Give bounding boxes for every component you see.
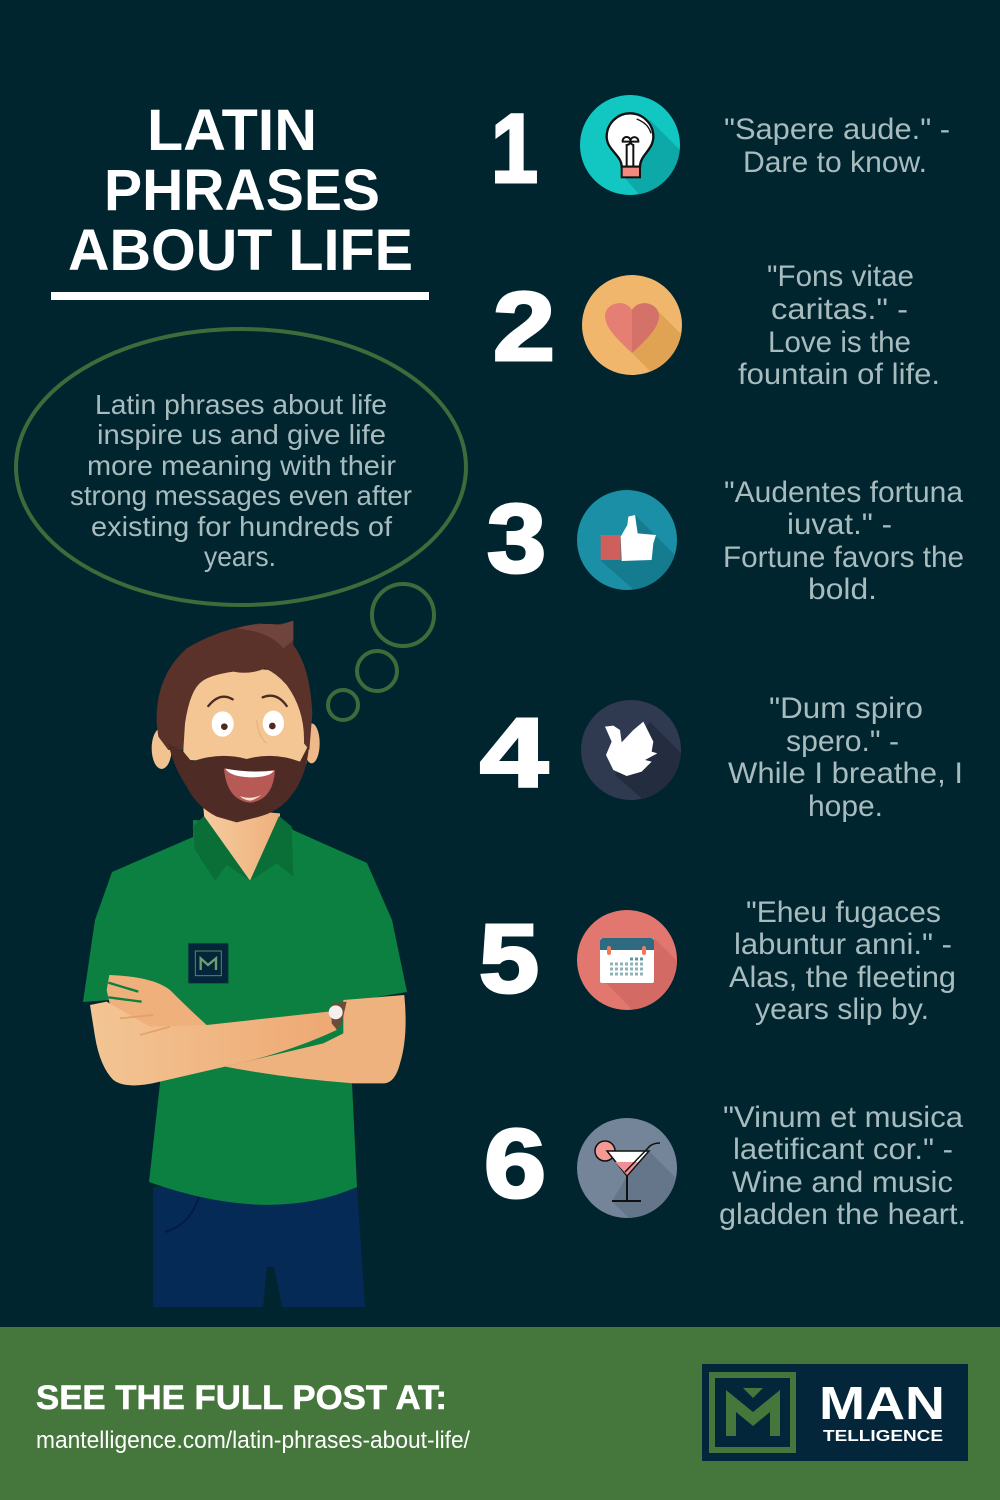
quote 2: fountain of life.: [738, 358, 940, 391]
number 4: 4: [480, 698, 548, 807]
quote 3: bold.: [808, 573, 877, 606]
thought bubble text: years.: [204, 541, 276, 572]
icon: heart: [582, 275, 682, 375]
quote 2: [738, 260, 940, 391]
quote 4: hope.: [808, 790, 883, 823]
quote 6: "Vinum et musica: [723, 1101, 963, 1134]
icon: light bulb: [580, 95, 680, 195]
quote 6: Wine and music: [732, 1166, 953, 1199]
icon: dove: [581, 700, 681, 800]
quote 3: "Audentes fortuna: [724, 476, 963, 509]
number 1: 1: [491, 94, 538, 203]
footer call to action: SEE THE FULL POST AT:: [36, 1379, 447, 1417]
quote 4: While I breathe, I: [728, 757, 963, 790]
quote 6: laetificant cor." -: [733, 1133, 953, 1166]
character: bearded man in green polo: [83, 621, 407, 1307]
quote 2: Love is the: [768, 326, 911, 359]
thought bubble text: existing for hundreds of: [91, 511, 392, 542]
quote 5: "Eheu fugaces: [746, 896, 941, 929]
quote 1: "Sapere aude." -: [724, 113, 950, 146]
quote 1: [724, 113, 950, 179]
title: [68, 98, 413, 283]
icon: calendar: [577, 910, 677, 1010]
title underline: [51, 292, 429, 300]
thought bubble text: [70, 389, 412, 572]
footer band: [0, 1327, 1000, 1500]
logo: Mantelligence: TELLIGENCE: [823, 1428, 943, 1445]
quote 3: [723, 476, 964, 606]
quote 6: gladden the heart.: [719, 1198, 966, 1231]
thought bubble text: strong messages even after: [70, 480, 412, 511]
quote 4: "Dum spiro: [769, 692, 923, 725]
quote 2: "Fons vitae: [767, 260, 914, 293]
title: PHRASES: [104, 158, 380, 223]
thought bubble text: inspire us and give life: [97, 419, 386, 450]
quote 4: [728, 692, 963, 823]
icon: thumbs up: [577, 490, 677, 590]
number 5: 5: [479, 904, 539, 1013]
quote 5: [729, 896, 956, 1026]
title: LATIN: [147, 98, 317, 163]
quote 3: iuvat." -: [787, 508, 892, 541]
number 3: 3: [487, 484, 546, 593]
quote 3: Fortune favors the: [723, 541, 964, 574]
number 6: 6: [484, 1109, 546, 1218]
number 2: 2: [493, 272, 555, 381]
icon: cocktail: [577, 1118, 677, 1218]
title: ABOUT LIFE: [68, 218, 413, 283]
quote 4: spero." -: [786, 725, 899, 758]
logo: Mantelligence: [702, 1364, 968, 1461]
thought bubble: [16, 329, 466, 720]
quote 5: years slip by.: [755, 993, 929, 1026]
quote 5: Alas, the fleeting: [729, 961, 956, 994]
quote 5: labuntur anni." -: [734, 928, 952, 961]
logo: Mantelligence: MAN: [819, 1377, 945, 1429]
quote 2: caritas." -: [771, 293, 908, 326]
thought bubble text: more meaning with their: [87, 450, 396, 481]
footer url: mantelligence.com/latin-phrases-about-life/: [36, 1427, 470, 1454]
quote 6: [719, 1101, 966, 1231]
quote 1: Dare to know.: [743, 146, 927, 179]
thought bubble text: Latin phrases about life: [95, 389, 387, 420]
